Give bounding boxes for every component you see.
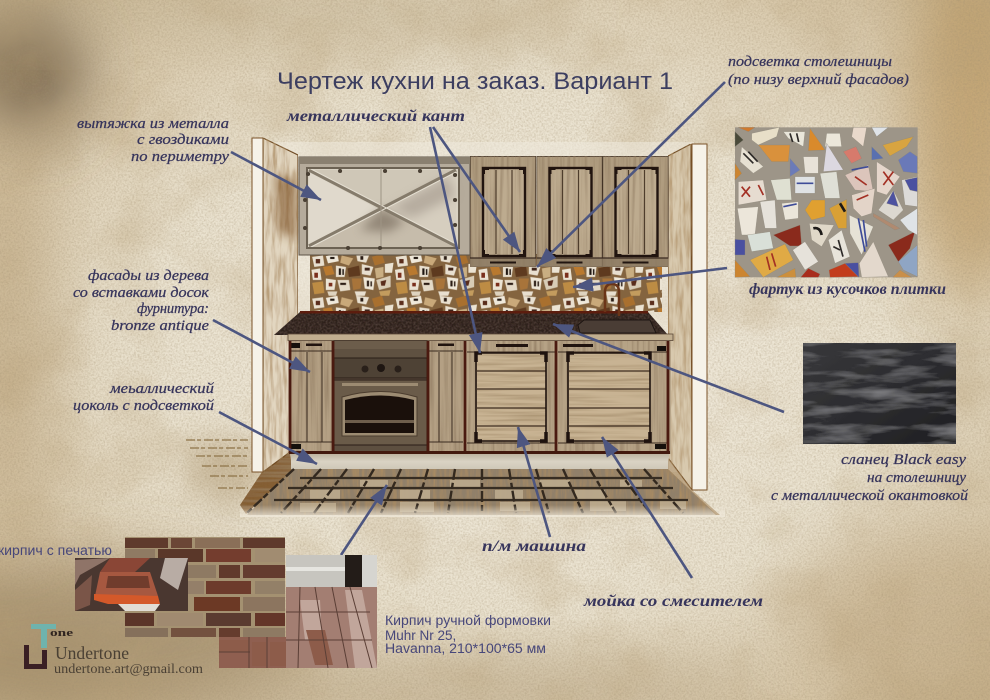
label: facades: со вставками досок xyxy=(73,285,209,301)
right wall stripe xyxy=(692,144,707,490)
left wall xyxy=(263,138,298,472)
logo: Undertone: Undertone xyxy=(55,643,129,663)
label: slate: с металлической окантовкой xyxy=(771,488,969,504)
brick floor photo xyxy=(219,555,377,668)
title: Чертеж кухни на заказ. Вариант 1 xyxy=(277,68,673,95)
label: countertop lighting: подсветка столешницы xyxy=(728,54,892,70)
door narrow xyxy=(429,341,463,452)
arrow: washing machine xyxy=(518,427,550,537)
upper cabinets xyxy=(470,156,668,267)
arrow: hood xyxy=(231,152,321,200)
label: slate: на столешницу xyxy=(867,470,967,486)
kitchen drawing xyxy=(185,138,725,517)
door left xyxy=(290,341,333,452)
label: facades: фасады из дерева xyxy=(88,268,209,284)
caption: handmade brick: Havanna, 210*100*65 мм xyxy=(385,641,546,656)
tile backsplash xyxy=(310,254,662,312)
metal edge xyxy=(288,334,673,340)
logo: Undertone: one xyxy=(50,627,73,639)
caption: handmade brick xyxy=(385,613,551,656)
arrow: plinth xyxy=(219,412,317,464)
oven xyxy=(334,341,427,452)
label: plinth xyxy=(73,381,215,414)
arrow: facades xyxy=(213,320,310,372)
label: plinth: цоколь с подсветкой xyxy=(73,398,215,414)
extractor hood xyxy=(299,157,470,255)
slate photo xyxy=(803,343,956,444)
arrows: metal trim xyxy=(430,127,520,353)
caption: handmade brick: Кирпич ручной формовки xyxy=(385,613,551,628)
label: countertop lighting: (по низу верхний фасадов) xyxy=(728,72,909,88)
brick wall photo xyxy=(125,537,285,637)
label: hood: по периметру xyxy=(131,149,230,165)
label: facades: фурнитура: xyxy=(137,301,209,317)
logo: Undertone: undertone.art@gmail.com xyxy=(54,662,203,677)
countertop xyxy=(274,284,668,335)
caption: handmade brick: Muhr Nr 25, xyxy=(385,628,456,643)
label: metal trim: металлический кант xyxy=(286,108,465,125)
label: hood: с гвоздиками xyxy=(137,132,229,148)
faucet xyxy=(605,284,619,316)
label: hood xyxy=(77,116,230,165)
label: plinth: меьаллический xyxy=(109,381,215,397)
arrow: floor xyxy=(341,485,387,555)
label: sink: мойка со смесителем xyxy=(583,593,763,610)
right wall xyxy=(668,144,692,490)
label: slate: сланец Black easy xyxy=(841,452,967,468)
arrow: sink xyxy=(602,437,692,578)
left side floor sketch xyxy=(185,438,292,514)
label: facades xyxy=(73,268,210,334)
label: washing machine: п/м машина xyxy=(482,538,586,555)
right floor sketch xyxy=(668,458,720,515)
base cabinets xyxy=(288,334,673,454)
back wall xyxy=(262,142,694,472)
left wall stripe xyxy=(252,138,263,472)
label: hood: вытяжка из металла xyxy=(77,116,229,132)
label: facades: bronze antique xyxy=(111,318,210,334)
left wall pencil shading xyxy=(274,172,297,240)
arrow: slate xyxy=(553,324,784,412)
mosaic tile photo xyxy=(735,127,918,277)
caption: stamped brick: кирпич с печатью xyxy=(0,543,112,558)
arrow: apron xyxy=(573,268,727,287)
sink xyxy=(578,320,656,333)
brick floor xyxy=(240,469,725,517)
label: slate xyxy=(771,452,969,504)
logo: Undertone xyxy=(24,624,203,677)
label: countertop lighting xyxy=(728,54,909,88)
plinth xyxy=(291,454,669,469)
sink door xyxy=(558,341,668,452)
label: apron: фартук из кусочков плитки xyxy=(749,281,946,298)
dishwasher door xyxy=(467,341,555,452)
stamped brick photo xyxy=(75,558,188,611)
arrow: countertop lighting xyxy=(537,82,725,267)
